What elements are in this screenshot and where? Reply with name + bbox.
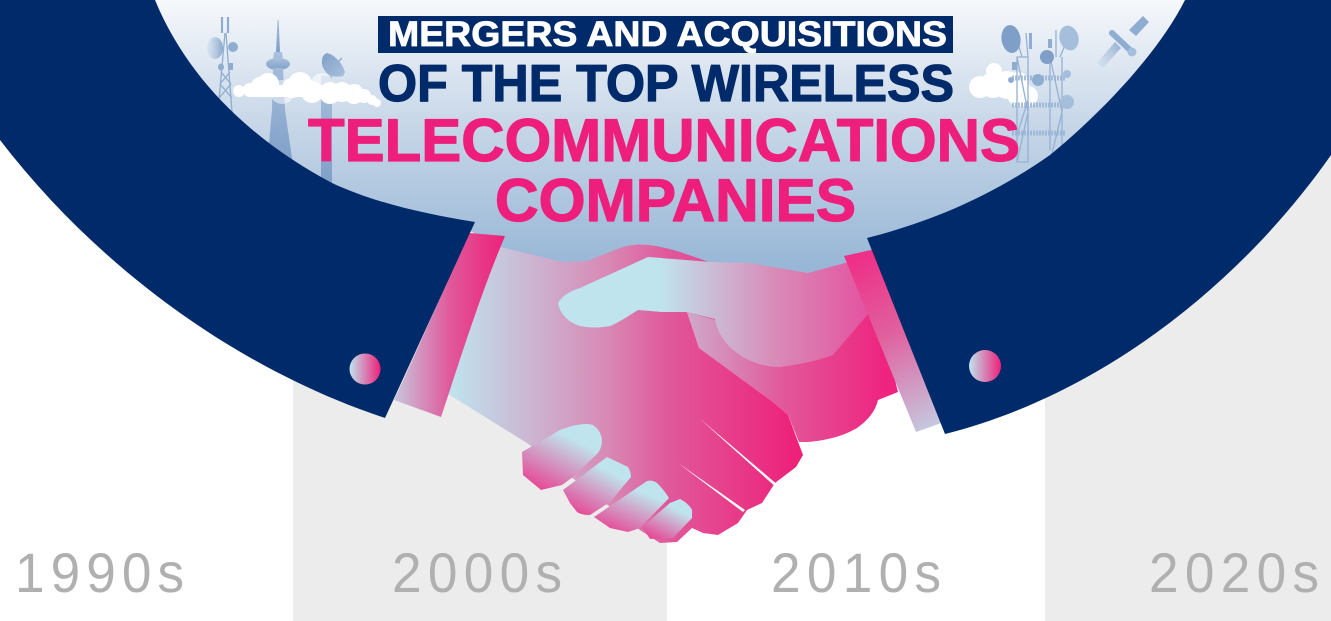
finger two — [563, 457, 631, 515]
decade label 1990s: 1990s — [15, 542, 184, 604]
finger one — [522, 424, 602, 490]
decade label 2020s: 2020s — [1149, 542, 1319, 604]
icon: cloud — [233, 72, 381, 107]
finger four — [642, 499, 692, 539]
illustration: handshake — [448, 245, 898, 543]
decade label 2000s: 2000s — [392, 542, 562, 604]
right navy sleeve — [867, 0, 1331, 434]
title line 4: COMPANIES — [495, 167, 856, 234]
left hand thumb highlight — [558, 257, 662, 328]
illustration: right tower, cloud and satellite — [969, 16, 1149, 162]
left hand — [448, 245, 803, 543]
left shirt cuff — [394, 233, 505, 417]
title line 1 banner: MERGERS AND ACQUISITIONS — [388, 15, 947, 54]
right hand — [687, 300, 898, 442]
illustration: left towers and cloud — [207, 17, 381, 186]
title line 2: OF THE TOP WIRELESS — [378, 55, 954, 113]
icon: satellite — [1097, 16, 1149, 68]
icon: lattice tower with dishes — [1000, 23, 1081, 162]
finger three — [594, 481, 669, 532]
sky backdrop — [140, 0, 1200, 285]
icon: dish tower — [321, 53, 345, 186]
icon: TV tower — [266, 20, 293, 165]
icon: lattice antenna tower — [207, 17, 238, 112]
title line 3: TELECOMMUNICATIONS — [308, 107, 1020, 174]
left cuff button — [350, 354, 380, 384]
right cuff button — [969, 350, 1001, 382]
left navy sleeve — [0, 0, 475, 418]
right hand thumb and palm — [660, 258, 875, 367]
title — [308, 15, 1020, 234]
decade label 2010s: 2010s — [771, 542, 941, 604]
finger gaps — [678, 418, 776, 512]
icon: cloud — [969, 63, 1038, 107]
right shirt cuff — [844, 248, 950, 432]
